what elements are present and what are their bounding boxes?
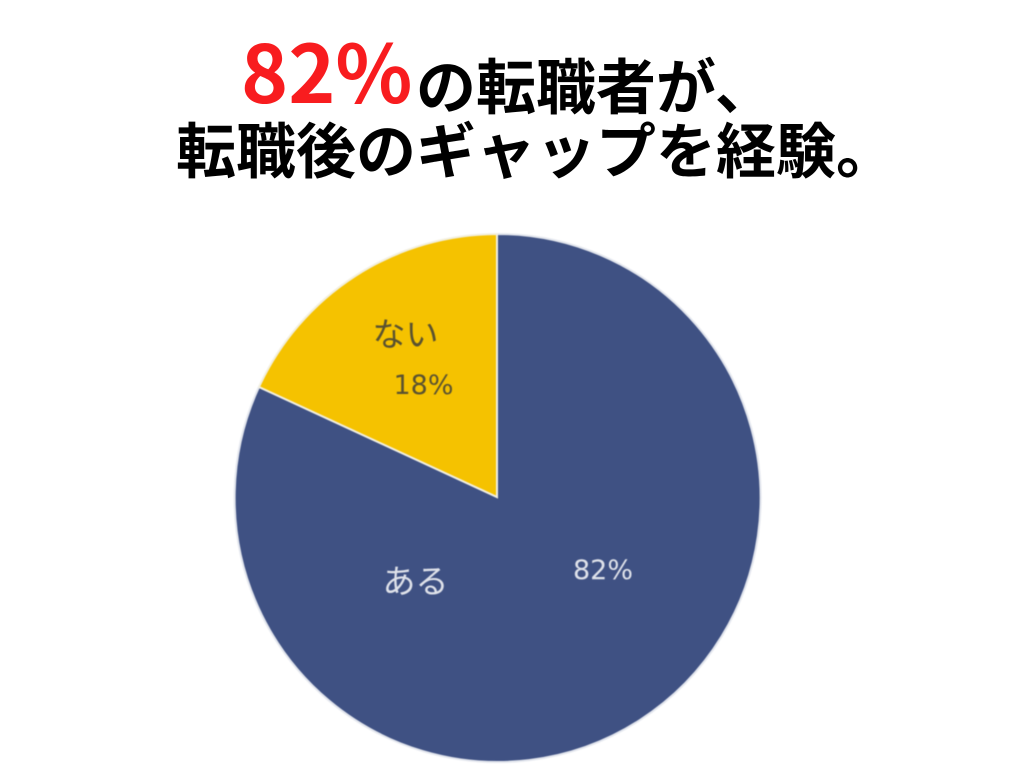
title xyxy=(176,11,896,191)
label: ない: ない xyxy=(372,308,438,356)
slice: ある 82% xyxy=(235,234,761,762)
title highlight: 82%: 82% xyxy=(241,11,412,127)
title line 1: の転職者が、 xyxy=(416,40,775,127)
label: 18%: 18% xyxy=(393,370,454,401)
slice: ない 18% xyxy=(259,234,497,497)
label: 82%: 82% xyxy=(573,555,633,586)
label: ある: ある xyxy=(382,555,448,603)
title line 2: 転職後のギャップを経験。 xyxy=(176,104,896,191)
